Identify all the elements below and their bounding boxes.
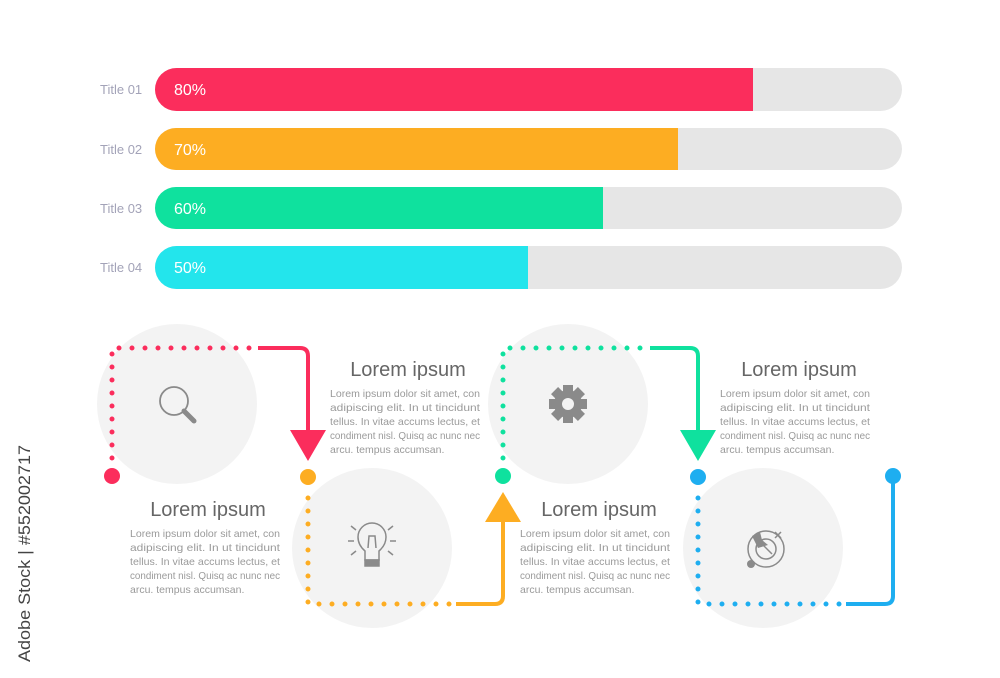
text block 4 (720, 359, 870, 456)
bar: Title 04: Title 04 (100, 260, 142, 275)
bar: Title 04: 50% (174, 260, 206, 277)
text block 4: condiment nisl. Quisq ac nunc nec (720, 430, 870, 442)
text block 1: Lorem ipsum (350, 359, 466, 381)
bar: Title 02: 70% (174, 142, 206, 159)
text block 3 (520, 499, 670, 596)
bar: Title 01 (100, 68, 902, 111)
text block 2: Lorem ipsum (150, 499, 266, 521)
bar: Title 04 (100, 246, 902, 289)
icon: orbit target (747, 531, 784, 568)
side watermark text: Adobe Stock | #552002717 (15, 445, 34, 662)
text block 1: arcu. tempus accumsan. (330, 444, 444, 456)
text block 1: tellus. In vitae accums lectus, et (330, 416, 480, 428)
text block 1: adipiscing elit. In ut tincidunt (330, 402, 480, 414)
icon: lightbulb (348, 523, 396, 566)
bar: Title 02: Title 02 (100, 142, 142, 157)
bar: Title 03: Title 03 (100, 201, 142, 216)
text block 3: arcu. tempus accumsan. (520, 584, 634, 596)
bar: Title 03 (100, 187, 902, 229)
text block 1 (330, 359, 480, 456)
text block 4: Lorem ipsum dolor sit amet, con (720, 388, 870, 400)
bar: Title 02 (100, 128, 902, 170)
text block 1: condiment nisl. Quisq ac nunc nec (330, 430, 480, 442)
text block 3: adipiscing elit. In ut tincidunt (520, 542, 670, 554)
text block 2 (130, 499, 280, 596)
arrow: orange path (300, 469, 521, 604)
text block 2: tellus. In vitae accums lectus, et (130, 556, 280, 568)
text block 4: tellus. In vitae accums lectus, et (720, 416, 870, 428)
circles (97, 324, 843, 628)
text block 3: tellus. In vitae accums lectus, et (520, 556, 670, 568)
text block 4: adipiscing elit. In ut tincidunt (720, 402, 870, 414)
text block 2: arcu. tempus accumsan. (130, 584, 244, 596)
text block 2: Lorem ipsum dolor sit amet, con (130, 528, 280, 540)
text block 3: condiment nisl. Quisq ac nunc nec (520, 570, 670, 582)
bar: Title 03: 60% (174, 201, 206, 218)
arrow: red path (104, 348, 326, 484)
arrow: blue path (690, 468, 901, 604)
bar chart (100, 68, 902, 289)
bar: Title 01: Title 01 (100, 82, 142, 97)
text block 2: adipiscing elit. In ut tincidunt (130, 542, 280, 554)
icon: gear (549, 385, 587, 423)
icon: magnifier (160, 387, 194, 421)
text block 4: arcu. tempus accumsan. (720, 444, 834, 456)
text block 4: Lorem ipsum (741, 359, 857, 381)
text block 3: Lorem ipsum dolor sit amet, con (520, 528, 670, 540)
arrow: green path (495, 348, 716, 484)
bar: Title 01: 80% (174, 82, 206, 99)
text block 2: condiment nisl. Quisq ac nunc nec (130, 570, 280, 582)
text block 3: Lorem ipsum (541, 499, 657, 521)
text block 1: Lorem ipsum dolor sit amet, con (330, 388, 480, 400)
